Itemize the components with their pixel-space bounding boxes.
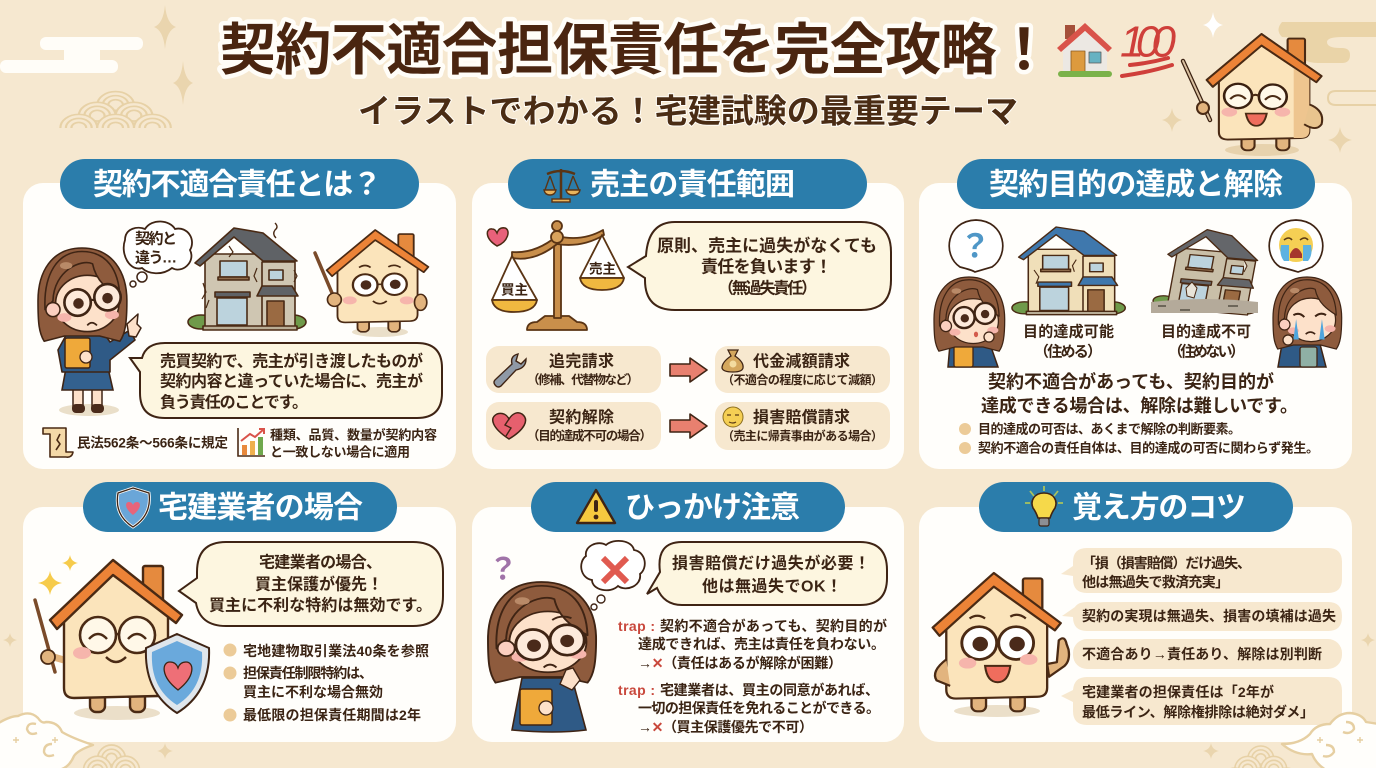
note bubble 2: [1062, 602, 1342, 631]
speech bubble: 買主に不利な特約は無効です。: [209, 596, 432, 614]
bullet list: 契約不適合の責任自体は、目的達成の可否に関わらず発生。: [978, 440, 1319, 456]
note bubble 1: 他は無過失で救済充実」: [1082, 574, 1229, 590]
speech bubble: 負う責任のことです。: [160, 392, 308, 412]
panel background: [472, 183, 904, 469]
panel: 売主の責任範囲: [472, 159, 904, 469]
mascot: top right house: [1183, 34, 1322, 156]
mascot: pointing house: [933, 573, 1069, 717]
card: 代金減額請求: （不適合の程度に応じて減額）: [722, 372, 883, 387]
panel: 契約目的の達成と解除: [919, 159, 1352, 469]
card: 損害賠償請求: [715, 402, 890, 450]
bullet list: [224, 643, 429, 723]
illustration: balance scale: 売主: [589, 260, 616, 276]
panel background: [23, 183, 456, 469]
speech bubble: 原則、売主に過失がなくても: [657, 236, 877, 256]
panel background: [919, 507, 1352, 742]
woman: crying: [1273, 277, 1342, 367]
panel: 宅建業者の場合: [23, 482, 456, 742]
sparkles: [38, 555, 78, 595]
note: applicable cases: 種類、品質、数量が契約内容: [270, 428, 437, 442]
card: 追完請求: 追完請求: [549, 352, 614, 370]
heading: [60, 159, 419, 209]
trap 2: →✕（買主保護優先で不可）: [638, 719, 813, 735]
label: achievable: （住める）: [1034, 342, 1102, 360]
card: 損害賠償請求: （売主に帰責事由がある場合）: [722, 428, 883, 443]
illustration: damaged house: [188, 223, 306, 330]
illustration: balance scale: 買主: [501, 282, 528, 298]
heading: 売主の責任範囲: [590, 168, 795, 202]
heading: [531, 482, 845, 532]
panel background: [472, 507, 904, 742]
icon: broken heart: [493, 413, 526, 439]
thought cloud: [124, 221, 192, 287]
icon: light bulb: [1025, 486, 1063, 526]
note bubble 3: 不適合あり→責任あり、解除は別判断: [1082, 646, 1322, 662]
card: 契約解除: [486, 402, 661, 450]
label: not achievable: 目的達成不可: [1161, 322, 1251, 340]
trap 1: 契約不適合があっても、契約目的が: [660, 618, 887, 634]
icon: heart: [487, 228, 508, 246]
arrow: [670, 358, 707, 382]
panel: 覚え方のコツ: [919, 482, 1352, 742]
trap 2: 宅建業者は、買主の同意があれば、: [660, 682, 879, 698]
heading: 覚え方のコツ: [1072, 492, 1246, 524]
note: applicable cases: [270, 428, 437, 460]
title: 契約不適合担保責任を完全攻略！: [220, 18, 1052, 82]
thought cloud: 契約と: [135, 230, 177, 248]
arrow: [670, 414, 707, 438]
panel background: [23, 507, 456, 742]
icon: house emoji: [1057, 23, 1112, 77]
decoration: bottom-right cloud: [1282, 713, 1376, 768]
heading: [508, 159, 867, 209]
speech bubble: 他は無過失でOK！: [702, 578, 842, 596]
illustration: repaired house: [1012, 227, 1125, 315]
decoration: bottom wave pattern right: [1222, 746, 1300, 768]
trap 2: 一切の担保責任を免れることができる。: [638, 700, 880, 716]
note bubble 2: 契約の実現は無過失、損害の填補は過失: [1082, 608, 1336, 624]
card: 契約解除: （目的達成不可の場合）: [527, 428, 652, 443]
note bubble 1: 「損（損害賠償）だけ過失、: [1082, 555, 1251, 571]
bullet list: 宅地建物取引業法40条を参照: [243, 643, 429, 659]
woman: worried: [488, 582, 596, 732]
trap 2: trap :: [618, 682, 655, 698]
woman: thinking: [934, 277, 1005, 367]
icon: small scales: [544, 169, 580, 202]
bullet list: 目的達成の可否は、あくまで解除の判断要素。: [978, 422, 1241, 436]
speech bubble: 責任を負います！: [701, 258, 832, 276]
heading: [957, 159, 1315, 209]
speech bubble: 損害賠償だけ過失が必要！: [672, 554, 870, 572]
woman character: [38, 248, 141, 416]
card: 代金減額請求: 代金減額請求: [753, 352, 850, 370]
bullet list: 最低限の担保責任期間は2年: [243, 707, 421, 723]
decoration: top-right bands: [1278, 22, 1376, 105]
thought cloud with X: [581, 541, 645, 610]
heading: 契約不適合責任とは？: [93, 168, 382, 202]
label: achievable: [1023, 322, 1114, 360]
card: 契約解除: 契約解除: [549, 408, 614, 426]
panel: 契約不適合責任とは: [23, 159, 456, 469]
note: applicable cases: と一致しない場合に適用: [270, 444, 410, 460]
bullet list: [959, 422, 1319, 456]
note bubble 4: 最低ライン、解除権排除は絶対ダメ」: [1082, 704, 1314, 720]
note bubble 1: [1061, 548, 1342, 593]
illustration: balance scale: [492, 221, 624, 330]
panel: ひっかけ注意: [472, 482, 904, 742]
decoration: top-left cloud bands: [0, 37, 143, 73]
note bubble 4: 宅建業者の担保責任は「2年が: [1082, 684, 1274, 700]
note: statute reference: 民法562条～566条に規定: [77, 434, 228, 450]
trap 2: [618, 682, 880, 735]
bullet list: 買主に不利な場合無効: [243, 684, 383, 700]
thought cloud: 違う…: [135, 248, 177, 266]
bubble: crying emoji: [1269, 220, 1323, 272]
label: not achievable: （住めない）: [1168, 342, 1245, 360]
trap 1: trap :: [618, 618, 655, 634]
heading: 契約目的の達成と解除: [989, 168, 1283, 202]
icon: face emoji: [723, 407, 743, 427]
heading: 宅建業者の場合: [158, 492, 363, 524]
speech bubble: [130, 343, 442, 418]
card: 損害賠償請求: 損害賠償請求: [753, 408, 850, 426]
speech bubble: [628, 222, 891, 310]
heading: [83, 482, 397, 532]
main text: 契約不適合があっても、契約目的が: [988, 371, 1274, 392]
icon: wrench: [494, 354, 526, 387]
icon: question mark: ？: [488, 554, 518, 586]
icon: small shield: [117, 488, 149, 527]
heading: ひっかけ注意: [625, 492, 800, 524]
icon: 100 emoji: 100: [1120, 18, 1177, 66]
trap 1: [618, 618, 887, 671]
subtitle: イラストでわかる！宅建試験の最重要テーマ: [358, 92, 1018, 130]
speech bubble: （無過失責任）: [718, 280, 817, 298]
card: 追完請求: [486, 346, 661, 393]
bubble: question: ？: [959, 228, 991, 264]
speech bubble: 宅建業者の場合、: [259, 552, 382, 572]
card: 代金減額請求: [715, 346, 890, 393]
label: achievable: 目的達成可能: [1023, 322, 1114, 340]
label: not achievable: [1161, 322, 1251, 360]
speech bubble: [647, 542, 887, 605]
speech bubble: 売買契約で、売主が引き渡したものが: [160, 352, 423, 370]
decoration: top-left wave pattern: [59, 90, 172, 128]
icon: warning: [577, 490, 615, 523]
illustration: shield: [146, 634, 209, 713]
icon: scroll: [43, 428, 73, 457]
card: 追完請求: （修補、代替物など）: [527, 372, 639, 387]
main text: 達成できる場合は、解除は難しいです。: [981, 395, 1298, 416]
bullet list: 担保責任制限特約は、: [243, 665, 373, 681]
note bubble 4: [1061, 677, 1342, 725]
main text: [981, 371, 1298, 416]
speech bubble: 契約内容と違っていた場合に、売主が: [160, 372, 423, 390]
mascot: house with pointer: [315, 230, 428, 337]
panel background: [919, 183, 1352, 469]
decoration: bottom-left cloud: [0, 713, 93, 768]
illustration: collapsed house: [1151, 226, 1270, 316]
speech bubble: 買主保護が優先！: [255, 574, 383, 594]
icon: chart: [238, 428, 265, 456]
note bubble 3: [1073, 639, 1342, 669]
icon: money bag: [722, 350, 743, 372]
decoration: bottom wave pattern left: [70, 745, 154, 768]
heading: [979, 482, 1293, 532]
trap 1: →✕（責任はあるが解除が困難）: [638, 655, 842, 671]
trap 1: 達成できれば、売主は責任を負わない。: [638, 636, 885, 652]
mascot: happy house with shield: [35, 560, 182, 720]
bubble: question: [949, 220, 1003, 272]
speech bubble: [179, 542, 443, 626]
